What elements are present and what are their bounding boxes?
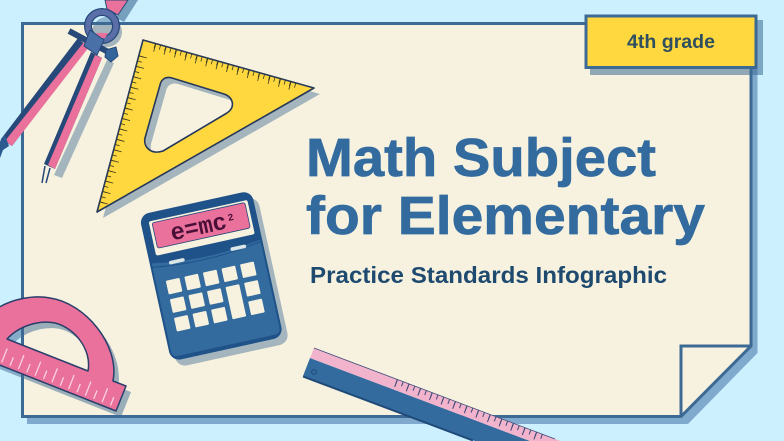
- protractor scale ticks: [3, 355, 120, 404]
- title: for Elementary: [306, 186, 705, 246]
- calculator keys: [166, 261, 265, 332]
- grade tag: 4th grade: [627, 32, 715, 53]
- left edge scale ticks: [101, 56, 143, 206]
- subtitle: Practice Standards Infographic: [310, 262, 667, 288]
- icon: ruler: [303, 348, 561, 441]
- icon: yellow set square: [97, 40, 320, 218]
- icon: drawing compass: [0, 0, 138, 183]
- ruler scale ticks: [396, 382, 545, 438]
- title: [306, 128, 705, 246]
- calculator indicator pills: [169, 244, 247, 265]
- grade tag: [586, 16, 763, 75]
- calculator screen: [149, 200, 255, 256]
- icon: calculator: [139, 190, 290, 368]
- calculator screen: 2: [227, 213, 235, 225]
- top edge scale ticks: [154, 46, 298, 88]
- icon: pink protractor: [0, 297, 131, 417]
- title: Math Subject: [306, 128, 656, 188]
- calculator screen: e=mc: [168, 210, 230, 248]
